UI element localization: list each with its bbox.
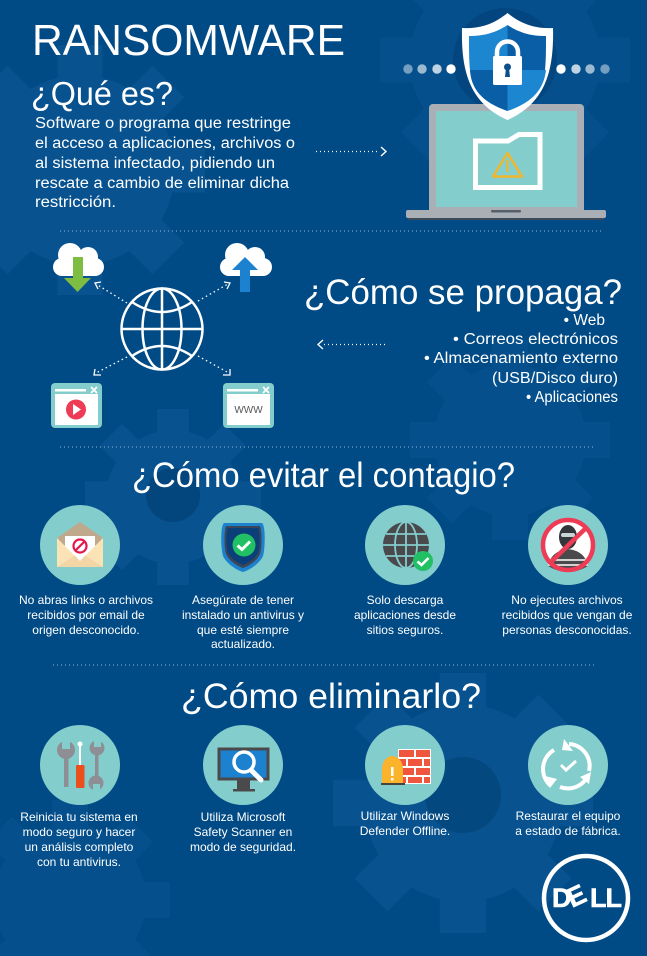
icon: globe with check xyxy=(365,505,445,585)
text: antivirus: instalado un antivirus y xyxy=(182,608,304,622)
heading: como se propaga: ¿Cómo se propaga? xyxy=(304,273,622,312)
list: propagation channels: • Aplicaciones xyxy=(526,389,618,406)
text: do not open links: recibidos por email de xyxy=(27,608,145,622)
description text: restricción. xyxy=(35,194,116,211)
heading: que es: ¿Qué es? xyxy=(31,75,173,112)
text: reboot safe mode xyxy=(20,810,138,869)
title: RANSOMWARE xyxy=(32,16,345,65)
text: unknown senders: No ejecutes archivos xyxy=(511,593,623,607)
description text: al sistema infectado, pidiendo un xyxy=(35,155,275,172)
heading: como evitar: ¿Cómo evitar el contagio? xyxy=(132,456,515,495)
icon: forbidden thief xyxy=(528,505,608,585)
text: safe downloads: Solo descarga xyxy=(367,593,444,607)
logo: dell: LL xyxy=(590,883,621,913)
shield xyxy=(462,13,553,120)
text: safe downloads xyxy=(354,593,456,637)
description text: Software o programa que restringe xyxy=(35,115,291,132)
dots left xyxy=(403,64,456,74)
text: safety scanner xyxy=(190,810,296,854)
icon: monitor scanner xyxy=(203,725,283,805)
divider xyxy=(60,446,596,448)
text: unknown senders: recibidos que vengan de xyxy=(502,608,633,622)
text: windows defender xyxy=(360,809,450,838)
text: do not open links: origen desconocido. xyxy=(32,623,140,637)
description text: rescate a cambio de eliminar dicha xyxy=(35,175,289,192)
logo: dell xyxy=(544,856,628,940)
text: safe downloads: aplicaciones desde xyxy=(354,608,456,622)
text: safety scanner: Safety Scanner en xyxy=(194,825,292,839)
icon: cloud upload xyxy=(220,243,272,292)
icon: tools xyxy=(40,725,120,805)
text: safe downloads: sitios seguros. xyxy=(367,623,443,637)
description text xyxy=(35,115,295,211)
list: propagation channels: • Almacenamiento externo xyxy=(424,350,618,367)
text: unknown senders xyxy=(502,593,633,637)
divider xyxy=(60,230,602,232)
arrow: to globe xyxy=(318,340,388,349)
icon: antivirus shield xyxy=(203,505,283,585)
list: propagation channels: • Web xyxy=(564,312,605,329)
diagram: propagation network xyxy=(51,243,274,428)
text: safety scanner: Utiliza Microsoft xyxy=(201,810,286,824)
text: reboot safe mode: Reinicia tu sistema en xyxy=(20,810,138,824)
description text: el acceso a aplicaciones, archivos o xyxy=(35,135,295,152)
text: reboot safe mode: un análisis completo xyxy=(25,840,134,854)
list: propagation channels xyxy=(424,312,618,406)
text: do not open links: No abras links o archivos xyxy=(19,593,153,607)
dots right xyxy=(556,64,610,74)
logo: dell: D xyxy=(552,883,572,913)
icon: www window xyxy=(223,383,274,428)
divider xyxy=(53,664,595,666)
text: factory restore: a estado de fábrica. xyxy=(515,824,621,838)
icon: envelope xyxy=(40,505,120,585)
icon: video window xyxy=(51,383,102,428)
text: antivirus: Asegúrate de tener xyxy=(192,593,294,607)
text: windows defender: Defender Offline. xyxy=(360,824,450,838)
text: reboot safe mode: con tu antivirus. xyxy=(37,855,121,869)
text: reboot safe mode: modo seguro y hacer xyxy=(23,825,135,839)
icon: cloud download xyxy=(53,243,104,292)
text: unknown senders: personas desconocidas. xyxy=(502,623,632,637)
text: factory restore xyxy=(515,809,621,838)
text: factory restore: Restaurar el equipo xyxy=(516,809,621,823)
list: propagation channels: (USB/Disco duro) xyxy=(492,370,618,387)
icon: factory restore xyxy=(528,725,608,805)
arrows xyxy=(94,282,230,375)
icon: laptop with shield xyxy=(403,13,610,220)
laptop body xyxy=(429,104,584,214)
heading: como eliminarlo: ¿Cómo eliminarlo? xyxy=(181,677,481,716)
icon: firewall alarm xyxy=(365,725,445,805)
folder with warning xyxy=(476,134,540,188)
logo: dell: E xyxy=(562,879,591,913)
text: safety scanner: modo de seguridad. xyxy=(190,840,296,854)
text: antivirus: que esté siempre xyxy=(197,623,289,637)
list: propagation channels: • Correos electrónicos xyxy=(453,331,618,348)
arrow: to laptop xyxy=(316,147,386,156)
text: antivirus xyxy=(182,593,304,651)
icon: globe xyxy=(121,288,203,370)
icon: www window: WWW xyxy=(234,405,263,416)
text: do not open links xyxy=(19,593,153,637)
text: antivirus: actualizado. xyxy=(211,637,275,651)
text: windows defender: Utilizar Windows xyxy=(361,809,449,823)
